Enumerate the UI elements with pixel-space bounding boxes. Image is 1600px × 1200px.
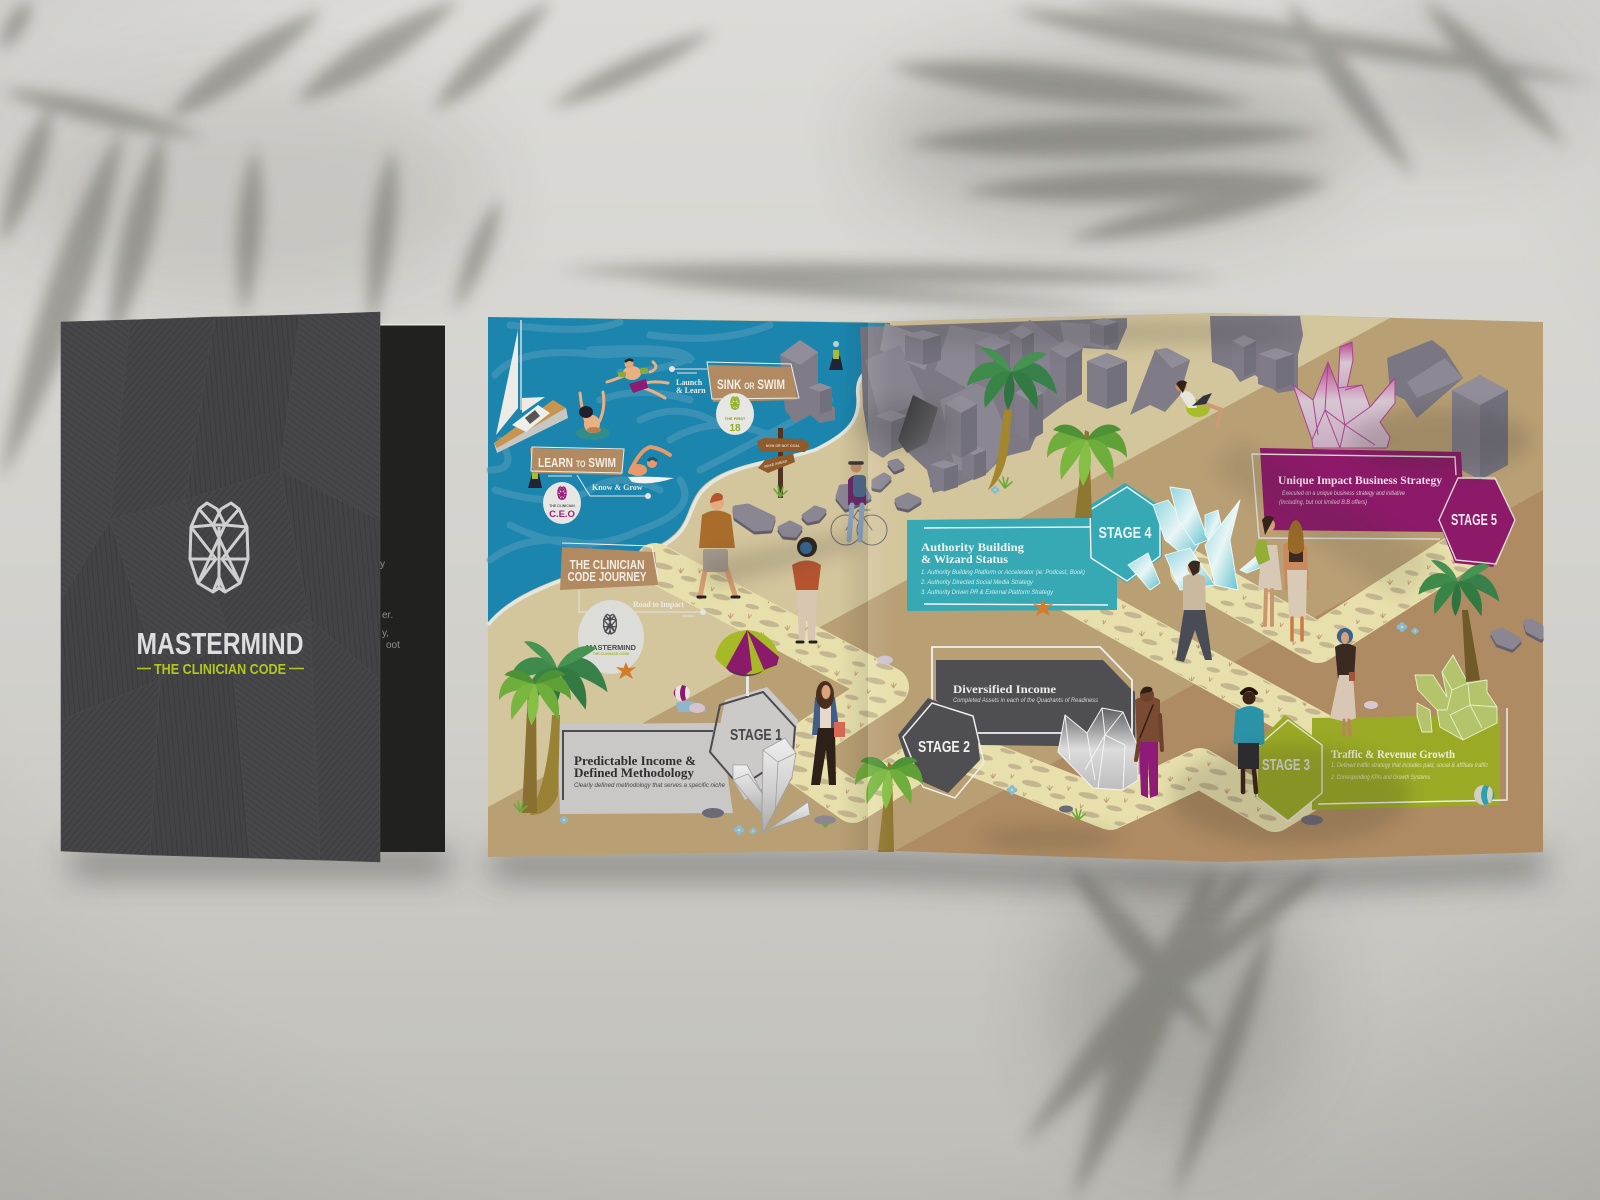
upper light sand zone (488, 313, 1390, 807)
main rock cliff with cave (860, 318, 1127, 493)
sign: the clinician code journey (560, 543, 706, 616)
swimmers (576, 360, 674, 483)
woman with red bag (811, 681, 845, 785)
booklet cover: front (61, 312, 380, 862)
cover title: MASTERMIND (136, 626, 304, 661)
badge: mastermind: THE CLINICIAN CODE (593, 652, 630, 656)
stage 5 title: Unique Impact Business Strategy (1278, 473, 1442, 487)
umbrella (715, 630, 779, 696)
stage 2 hexagon (898, 698, 980, 793)
stage 4 title (921, 540, 1024, 566)
stage 5 panel: STAGE 5 (1451, 512, 1497, 529)
stage 4 list: 3. Authority Driven PR & External Platform Strategy (921, 589, 1054, 596)
back page text fragments: er. (382, 610, 393, 621)
badge: clinician ceo: THE CLINICIAN (549, 504, 575, 508)
woman with dark curly hair (792, 537, 821, 642)
small stones (702, 656, 1378, 825)
badge: mastermind (578, 600, 644, 674)
stage 4 panel (907, 483, 1162, 611)
palm shadows over the booklet (700, 318, 1530, 850)
sign: the clinician code journey: CODE JOURNEY (568, 570, 647, 584)
stage 5 hexagon (1438, 478, 1515, 567)
sea (488, 317, 890, 625)
starfish left (616, 662, 636, 679)
stage 3 hexagon (1253, 715, 1323, 820)
beach ball teal (1474, 785, 1494, 805)
swimmer in magenta shorts (607, 360, 668, 398)
stage 5 panel (1252, 448, 1515, 567)
green crystal (1415, 655, 1497, 740)
stage 2 panel: STAGE 2 (918, 739, 970, 756)
front crawl swimmer (628, 447, 674, 483)
cover subtitle: THE CLINICIAN CODE (154, 661, 286, 678)
label: launch and learn: & Learn (676, 386, 706, 395)
stage 5 description: (Including, but not limited B:B offers) (1279, 499, 1367, 506)
stage 1 title: Predictable Income & (574, 754, 696, 768)
sign: sink or swim (669, 362, 799, 402)
page base sand (488, 313, 1543, 862)
palm left front (499, 670, 571, 813)
signpost: NOW OR NOT GOAL (766, 444, 801, 448)
sign: sink or swim: SINK OR SWIM (717, 377, 785, 392)
stage 3 list: 2. Corresponding KPIs and Growth Systems (1330, 774, 1431, 781)
cover logo (190, 503, 248, 592)
grass tufts (514, 477, 1085, 827)
stage 3 list: 1. Defined traffic strategy that includes paid, social & affiliate traffic (1331, 762, 1489, 769)
signpost (757, 428, 810, 498)
stage 4 list: 2. Authority Directed Social Media Strategy (920, 579, 1034, 586)
palm by stage 2 (855, 757, 923, 852)
people (698, 380, 1356, 798)
stage 1 panel: STAGE 1 (730, 727, 782, 744)
stage 4 hexagon (1087, 483, 1162, 583)
booklet cover: back page (380, 324, 445, 852)
stage 1 title (574, 754, 696, 780)
white crystal 1 (733, 738, 810, 833)
sign: the clinician code journey: THE CLINICIAN (570, 558, 644, 572)
starfish (616, 599, 1053, 679)
palm at cliff (967, 348, 1057, 490)
stage 1 title: Defined Methodology (574, 766, 695, 780)
man with red hair (698, 493, 739, 597)
back page text fragments (380, 559, 400, 651)
buoys (528, 341, 843, 488)
stage 4 list (920, 569, 1085, 596)
cyan crystal (1128, 487, 1262, 590)
stage 1 hexagon (715, 687, 798, 800)
back page text fragments: y (380, 559, 385, 570)
stage 4 list: 1. Authority Building Platform or Accelerator (ie: Podcast, Book) (921, 569, 1085, 576)
label: launch and learn (676, 378, 706, 395)
cave opening (898, 395, 938, 453)
flowers near crystal 1 (560, 816, 757, 835)
badge: the first 18: 18 (729, 423, 741, 434)
stage 3 title: Traffic & Revenue Growth (1331, 747, 1455, 761)
cyclist (831, 462, 887, 545)
palm trees (499, 348, 1499, 852)
label: know and grow: Know & Grow (592, 483, 643, 492)
lower dark sand zone (868, 490, 1543, 862)
shirtless man (1135, 687, 1162, 798)
label: launch and learn: Launch (676, 378, 703, 387)
right buoy (829, 341, 843, 370)
decorative flowers and grass (514, 477, 1419, 835)
starfish centre (1033, 599, 1053, 616)
badge: mastermind: MASTERMIND (586, 643, 637, 652)
woman with blue hair (1330, 628, 1356, 735)
stage 2 panel (898, 647, 1135, 798)
stage 1 description: Clearly defined methodology that serves a specific niche (574, 782, 725, 789)
man with laptop (1176, 380, 1222, 425)
swimmer in float ring (576, 392, 610, 440)
beach ball and towels (674, 685, 706, 713)
boulders (780, 316, 1508, 480)
badge: the first 18: THE FIRST (725, 416, 746, 421)
flowers right (991, 486, 1419, 795)
stage 2 title: Diversified Income (953, 682, 1057, 696)
left buoy (528, 464, 542, 488)
palm right (1418, 560, 1499, 682)
stage 2 description: Completed Assets in each of the Quadrants of Readiness (953, 697, 1099, 704)
white crystal 2 (1058, 708, 1138, 790)
palm centre upper (1047, 425, 1127, 518)
back page text fragments: oot (386, 640, 400, 651)
woman with long hair (1283, 520, 1309, 640)
man in teal sweatshirt (1236, 689, 1262, 792)
open booklet map (488, 313, 1543, 862)
woman with green backpack (1255, 516, 1282, 625)
badge: clinician ceo: C.E.O (549, 509, 575, 520)
palm left rear (509, 641, 608, 815)
stage 4 title: Authority Building (921, 540, 1024, 554)
stage 3 list (1330, 762, 1489, 781)
stage 5 description: Executed on a unique business strategy and initiative (1282, 490, 1405, 497)
badge: the first 18 (716, 393, 754, 435)
cover leaf hatch pattern (61, 312, 380, 862)
water swirls (490, 322, 830, 560)
pink crystal (1293, 342, 1395, 448)
stage 4 title: & Wizard Status (921, 552, 1008, 566)
stage 3 panel (1253, 708, 1507, 821)
stage 3 panel: STAGE 3 (1262, 757, 1310, 774)
stage 4 panel: STAGE 4 (1098, 525, 1152, 542)
stage 1 panel (557, 687, 798, 814)
winding path (655, 552, 1460, 812)
badge: clinician ceo (543, 482, 581, 524)
man with beard (1176, 561, 1212, 662)
stepping stones (735, 461, 1541, 650)
sailboat (494, 320, 568, 453)
back page text fragments: y, (382, 628, 389, 639)
sign: learn to swim (530, 447, 651, 499)
label: road to impact: Road to Impact (633, 600, 684, 609)
page fold shading (838, 322, 894, 850)
signpost: ROAD AHEAD (764, 459, 788, 469)
sign: learn to swim: LEARN TO SWIM (538, 455, 616, 470)
stage 5 description (1279, 490, 1405, 506)
booklet cast shadow (70, 850, 1545, 892)
